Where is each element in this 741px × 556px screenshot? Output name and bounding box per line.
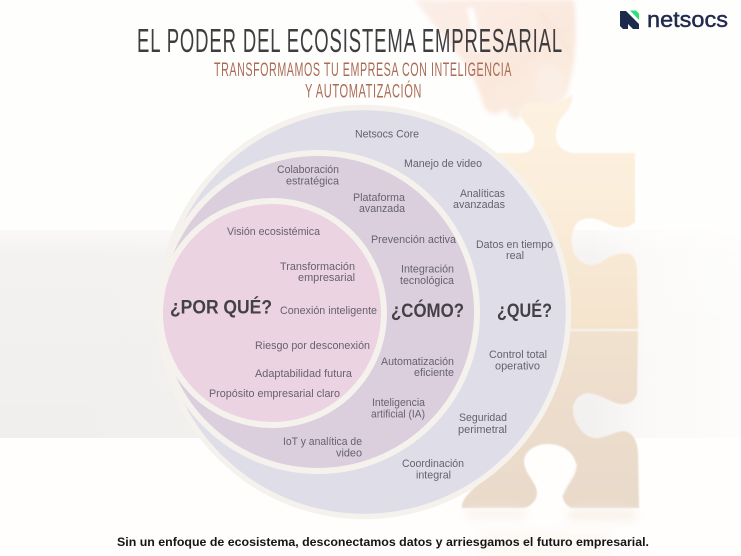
subtitle [214, 59, 512, 102]
icon: netsocs mark [620, 10, 639, 29]
highlight between fingers [467, 8, 482, 52]
label: Inteligencia artificial (IA): artificial (IA) [371, 408, 425, 420]
label: Plataforma avanzada: avanzada [359, 203, 406, 215]
fingernail [535, 65, 563, 103]
label: Coordinación integral [402, 458, 464, 482]
outer ring: ¿Qué? [160, 108, 568, 516]
label: Transformación empresarial: empresarial [298, 272, 355, 284]
logo: netsocs [620, 7, 728, 32]
notch highlight [563, 464, 576, 494]
label: Integración tecnológica [400, 264, 455, 287]
footer statement: Sin un enfoque de ecosistema, desconectamos datos y arriesgamos el futuro empresarial. [117, 537, 649, 549]
label: Visión ecosistémica: Visión ecosistémica [227, 226, 321, 238]
heading: ¿Cómo?: ¿CÓMO? [391, 300, 464, 322]
label: Datos en tiempo real [476, 239, 553, 262]
label: Transformación empresarial [280, 261, 355, 284]
label: Manejo de video: Manejo de video [404, 158, 482, 170]
label: Seguridad perimetral: Seguridad [459, 412, 507, 424]
label: Conexión inteligente: Conexión inteligente [280, 305, 377, 317]
label: Datos en tiempo real: Datos en tiempo [476, 239, 553, 251]
label: Automatización eficiente: Automatización [381, 356, 454, 368]
label: Riesgo por desconexión: Riesgo por desconexión [255, 340, 370, 352]
label: Control total operativo: operativo [495, 360, 540, 372]
label: IoT y analítica de video: video [336, 448, 362, 460]
lower puzzle block [462, 331, 639, 508]
label: Seguridad perimetral: perimetral [458, 424, 507, 436]
label: Colaboración estratégica: estratégica [286, 176, 340, 188]
subtitle: TRANSFORMAMOS TU EMPRESA CON INTELIGENCIA [214, 59, 512, 81]
heading: ¿Por qué?: ¿POR QUÉ? [170, 296, 272, 318]
label: Propósito empresarial claro: Propósito empresarial claro [209, 388, 340, 400]
upper puzzle block [461, 94, 638, 329]
label: Coordinación integral: Coordinación [402, 458, 464, 470]
puzzle reflection [466, 510, 636, 556]
label: Colaboración estratégica: Colaboración [277, 164, 339, 176]
label: Analíticas avanzadas: Analíticas [460, 188, 505, 200]
diagram labels [170, 128, 553, 482]
label: Netsocs Core: Netsocs Core [355, 128, 419, 140]
label: Control total operativo [489, 349, 547, 372]
hand holding the puzzle piece [415, 0, 576, 119]
label: IoT y analítica de video [283, 436, 362, 460]
label: Plataforma avanzada [353, 192, 406, 215]
subtitle: Y AUTOMATIZACIÓN [305, 80, 422, 102]
label: Seguridad perimetral [458, 412, 507, 436]
label: Control total operativo: Control total [489, 349, 547, 361]
puzzle piece [461, 94, 639, 508]
label: Datos en tiempo real: real [506, 250, 524, 262]
label: Integración tecnológica: Integración [401, 264, 454, 276]
label: Analíticas avanzadas [453, 188, 505, 211]
label: Automatización eficiente [381, 356, 454, 379]
wordmark: netsocs [647, 7, 728, 32]
heading: ¿Qué?: ¿QUÉ? [497, 300, 552, 322]
label: Integración tecnológica: tecnológica [400, 275, 455, 287]
label: Plataforma avanzada: Plataforma [353, 192, 406, 204]
label: IoT y analítica de video: IoT y analítica de [283, 436, 362, 448]
label: Inteligencia artificial (IA) [371, 397, 426, 420]
label: Prevención activa: Prevención activa [371, 234, 457, 246]
label: Transformación empresarial: Transformación [280, 261, 355, 273]
label: Coordinación integral: integral [416, 470, 451, 482]
middle ring: ¿Cómo? [159, 153, 477, 471]
label: Inteligencia artificial (IA): Inteligencia [372, 397, 426, 409]
label: Analíticas avanzadas: avanzadas [453, 199, 505, 211]
inner circle: ¿Por qué? [160, 201, 384, 425]
concentric circle diagram [159, 108, 568, 516]
label: Colaboración estratégica [277, 164, 340, 188]
label: Adaptabilidad futura: Adaptabilidad futura [255, 368, 353, 380]
label: Automatización eficiente: eficiente [414, 367, 454, 379]
